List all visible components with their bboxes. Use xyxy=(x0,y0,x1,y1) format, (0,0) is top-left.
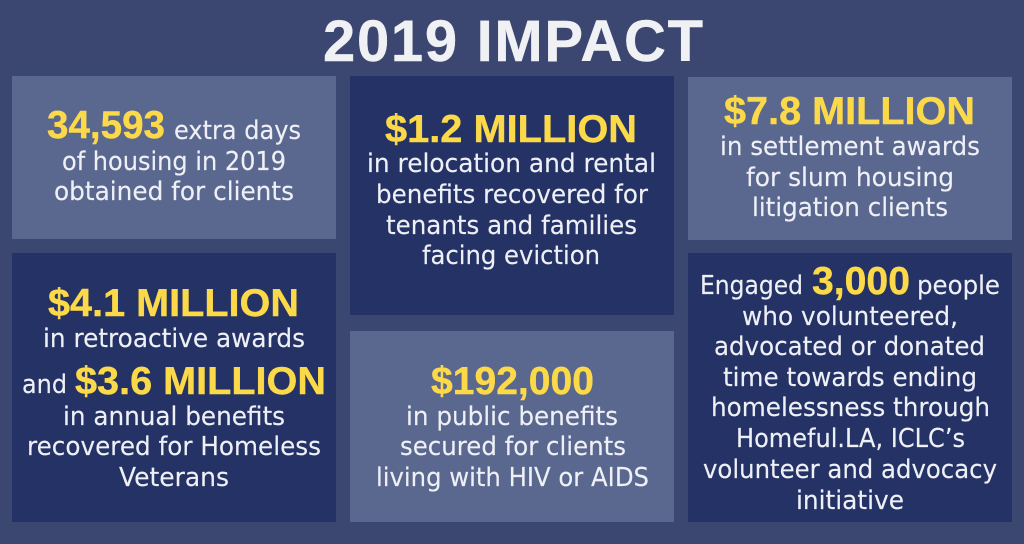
text: settlement description xyxy=(720,132,980,223)
stat: 34,593: 34,593 xyxy=(47,104,165,147)
text: volunteer description: homelessness through xyxy=(711,393,990,423)
text: extra days of housing: obtained for clients xyxy=(54,177,294,207)
text: and: and xyxy=(22,370,67,400)
text: relocation description: benefits recovered for xyxy=(376,180,648,210)
text: relocation description: facing eviction xyxy=(422,241,600,271)
text: public benefits description: secured for clients xyxy=(400,432,626,462)
text: extra days of housing xyxy=(54,116,301,207)
panel: extra days of housing xyxy=(12,76,336,239)
text: relocation description xyxy=(367,149,656,271)
stat: 3,000: 3,000 xyxy=(812,260,910,303)
text: volunteer description: advocated or donated xyxy=(714,332,985,362)
title: 2019 IMPACT xyxy=(323,9,703,74)
panel: volunteers engaged xyxy=(688,253,1012,522)
stat: $3.6 million: $3.6 MILLION xyxy=(75,360,326,403)
text: volunteer description: who volunteered, xyxy=(742,302,958,332)
stat: $4.1 million: $4.1 MILLION xyxy=(48,282,299,325)
stat: $7.8 million: $7.8 MILLION xyxy=(724,90,975,133)
text: engaged: Engaged xyxy=(700,271,803,301)
text: public benefits description: in public benefits xyxy=(406,402,618,432)
text: volunteer description: initiative xyxy=(796,486,904,516)
text: volunteer description xyxy=(703,271,1000,516)
text: volunteer description: people xyxy=(917,271,1000,301)
text: annual benefits description: recovered for Homeless xyxy=(27,432,321,462)
text: annual benefits description xyxy=(27,402,321,493)
text: public benefits description xyxy=(376,402,649,493)
text: public benefits description: living with HIV or AIDS xyxy=(376,463,649,493)
text: relocation description: in relocation and rental xyxy=(367,149,656,179)
text: volunteer description: time towards ending xyxy=(723,363,977,393)
panel: homeless veterans benefits xyxy=(12,253,336,522)
text: volunteer description: volunteer and advocacy xyxy=(703,455,997,485)
text: settlement description: for slum housing xyxy=(746,163,954,193)
text: extra days of housing: extra days xyxy=(174,116,301,146)
text: settlement description: litigation clients xyxy=(752,193,948,223)
text: settlement description: in settlement awards xyxy=(720,132,980,162)
stat: $1.2 million: $1.2 MILLION xyxy=(385,108,637,151)
stat: $192,000: $192,000 xyxy=(431,360,594,403)
text: annual benefits description: in annual benefits xyxy=(63,402,285,432)
panel: relocation and rental benefits xyxy=(350,76,674,315)
text: annual benefits description: Veterans xyxy=(119,463,229,493)
text: retroactive awards: in retroactive awards xyxy=(43,324,305,354)
panel: settlement awards xyxy=(688,77,1012,240)
text: relocation description: tenants and families xyxy=(386,211,637,241)
panel: public benefits xyxy=(350,331,674,522)
text: extra days of housing: of housing in 2019 xyxy=(62,147,286,177)
text: volunteer description: Homeful.LA, ICLC’s xyxy=(736,424,965,454)
